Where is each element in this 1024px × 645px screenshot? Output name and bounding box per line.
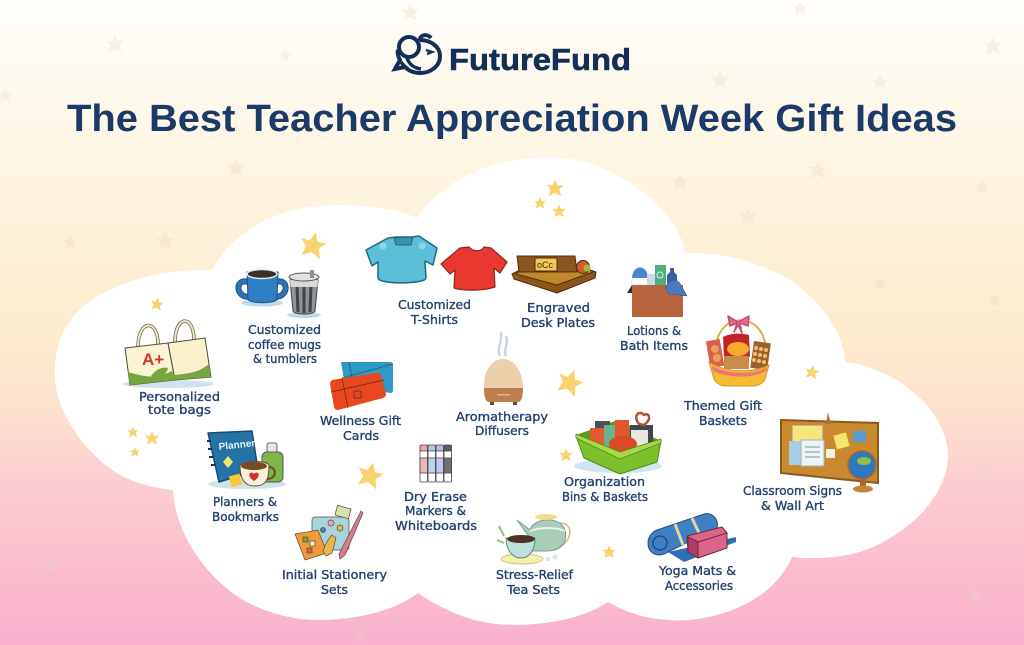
label [282, 568, 387, 597]
label: Baskets [699, 414, 747, 428]
item: personalized tote bags [122, 321, 220, 417]
label: Desk Plates [521, 316, 595, 330]
icon: desk plate: oCc [537, 260, 554, 270]
label: Bath Items [620, 339, 688, 353]
label: Stress-Relief [496, 568, 574, 582]
icon: bee [395, 35, 440, 73]
label: tote bags [148, 403, 211, 417]
item: organization bins and baskets [562, 413, 662, 504]
label: Bins & Baskets [562, 490, 648, 504]
icon: gift basket [706, 316, 771, 386]
label: Customized [248, 323, 321, 337]
item: wellness gift cards [320, 362, 401, 443]
label: Personalized [139, 390, 220, 404]
label [139, 390, 220, 417]
label: Initial Stationery [282, 568, 387, 582]
label [398, 298, 471, 327]
label: Classroom Signs [743, 484, 842, 498]
label: Customized [398, 298, 471, 312]
label: Lotions & [627, 324, 681, 338]
label [248, 323, 321, 366]
icon: planner and mug: Planner [218, 438, 256, 453]
logo [395, 35, 631, 77]
label: Themed Gift [683, 399, 762, 413]
label: Engraved [527, 301, 590, 315]
icon: tote bags: A+ [142, 350, 164, 369]
label: Cards [343, 429, 379, 443]
label: Diffusers [475, 424, 529, 438]
item: planners and bookmarks [207, 431, 286, 524]
label: Bookmarks [212, 510, 279, 524]
label: Wellness Gift [320, 414, 401, 428]
icon: box of lotions [627, 265, 687, 317]
label: Yoga Mats & [658, 564, 736, 578]
label [212, 495, 279, 524]
icon: markers [420, 445, 452, 482]
label [320, 414, 401, 443]
item: dry erase markers and whiteboards [395, 445, 477, 533]
panel: white cloud [55, 157, 948, 625]
item: customized t-shirts [366, 236, 507, 327]
label: Dry Erase [404, 490, 467, 504]
item: classroom signs and wall art [743, 412, 878, 513]
item: stress-relief tea sets [496, 514, 574, 597]
label: Aromatherapy [456, 410, 548, 424]
label [620, 324, 688, 353]
icon: diffuser [484, 332, 523, 405]
icon: teapot and cup [497, 514, 570, 564]
label: Organization [564, 475, 645, 489]
icon: green bin [574, 413, 662, 474]
item: initial stationery sets [282, 505, 387, 597]
label: & tumblers [253, 352, 317, 366]
label [496, 568, 574, 597]
label: Sets [321, 583, 348, 597]
title: The Best Teacher Appreciation Week Gift Ideas [67, 98, 957, 140]
icon: yoga mat and block [648, 514, 736, 562]
label [521, 301, 595, 330]
label: Tea Sets [506, 583, 560, 597]
label: T-Shirts [410, 313, 458, 327]
item: yoga mats and accessories [648, 514, 736, 593]
wordmark: FutureFund [449, 42, 631, 77]
label: Whiteboards [395, 519, 477, 533]
item: lotions and bath items [620, 265, 688, 353]
gold stars [128, 180, 820, 558]
item: customized coffee mugs and tumblers [238, 270, 321, 366]
label: Markers & [405, 504, 466, 518]
label: Planners & [213, 495, 277, 509]
icon: stationery [295, 505, 363, 560]
icon: gift cards [330, 362, 393, 410]
label [683, 399, 762, 428]
item: engraved desk plates [512, 256, 596, 330]
label: & Wall Art [761, 499, 824, 513]
icon: t-shirts [366, 236, 507, 290]
icon: mug and tumbler [238, 270, 321, 318]
label [456, 410, 548, 438]
label [395, 490, 477, 533]
item: themed gift baskets [683, 316, 771, 428]
label: coffee mugs [248, 338, 321, 352]
item: aromatherapy diffusers [456, 332, 548, 438]
label [658, 564, 736, 593]
icon: cork board and globe [781, 412, 878, 492]
label: Accessories [665, 579, 733, 593]
label [562, 475, 648, 504]
label [743, 484, 842, 513]
